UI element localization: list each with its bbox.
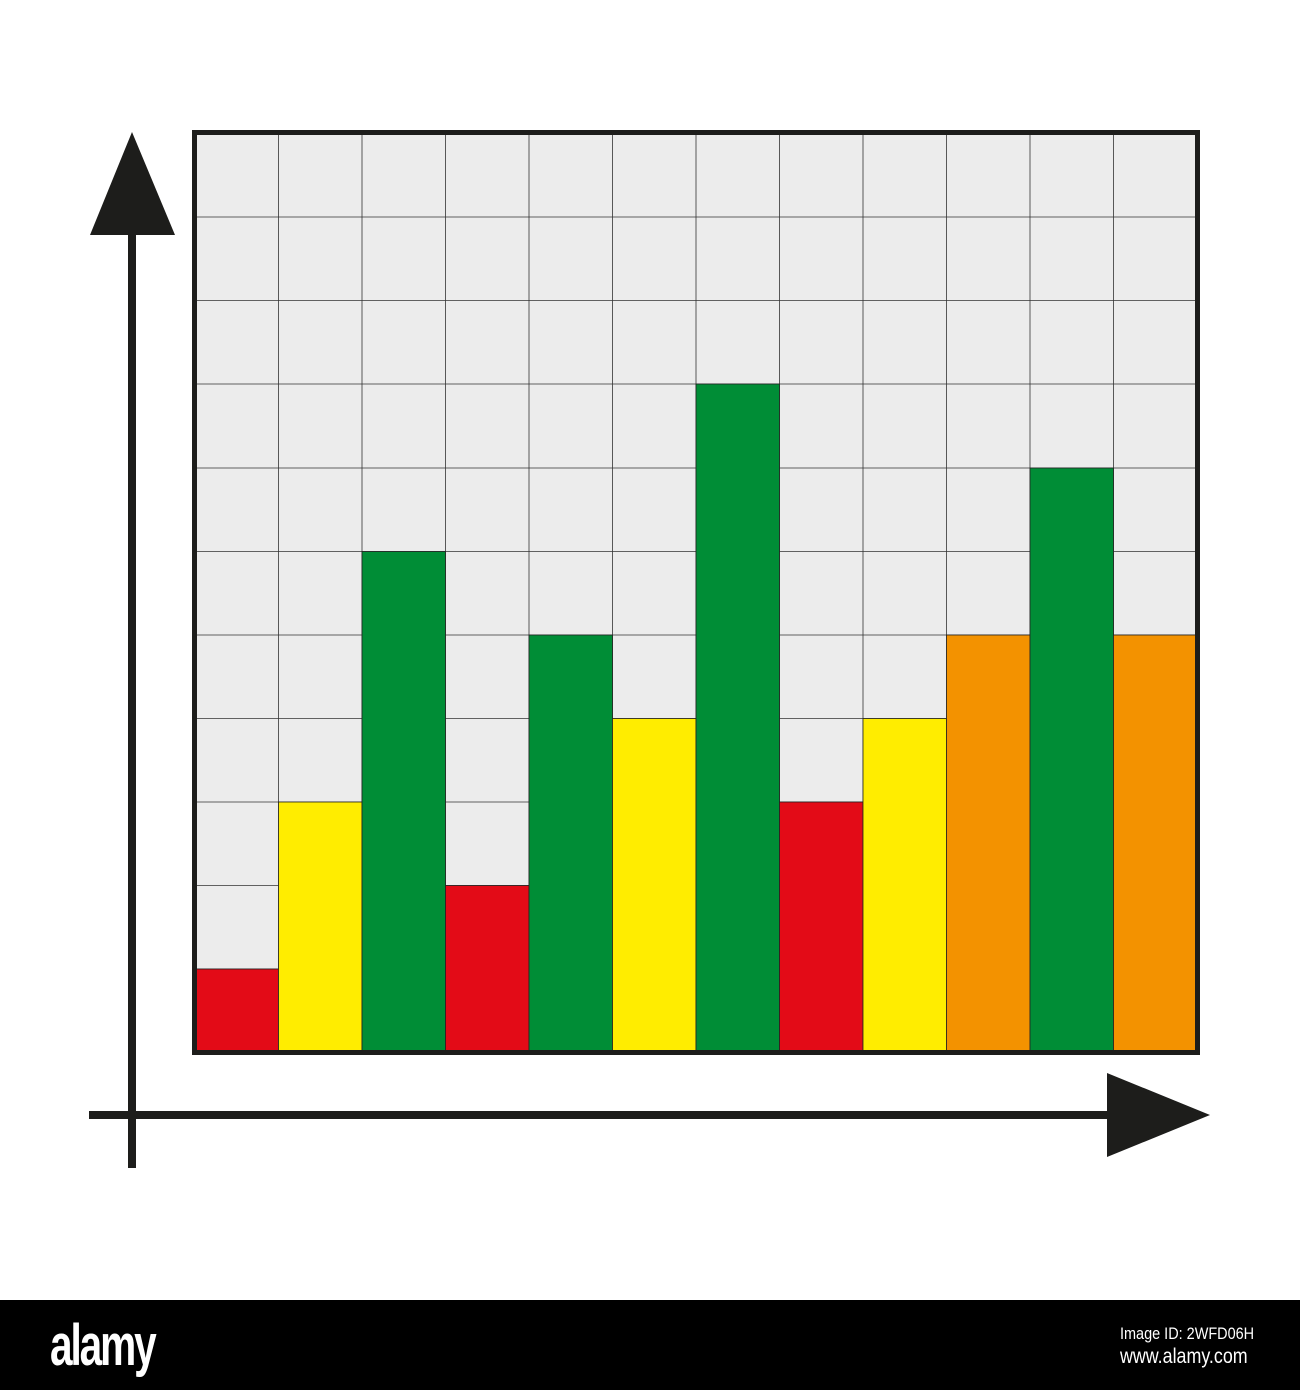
- footer bar: [0, 1300, 1300, 1390]
- y axis arrow: [90, 132, 175, 1168]
- logo: alamy: [50, 1313, 155, 1378]
- x axis arrow: [89, 1073, 1210, 1157]
- url: www.alamy.com: [1120, 1345, 1248, 1368]
- bars: [195, 384, 1197, 1052]
- image id: Image ID: 2WFD06H: [1120, 1324, 1254, 1343]
- plot panel: [195, 133, 1197, 1052]
